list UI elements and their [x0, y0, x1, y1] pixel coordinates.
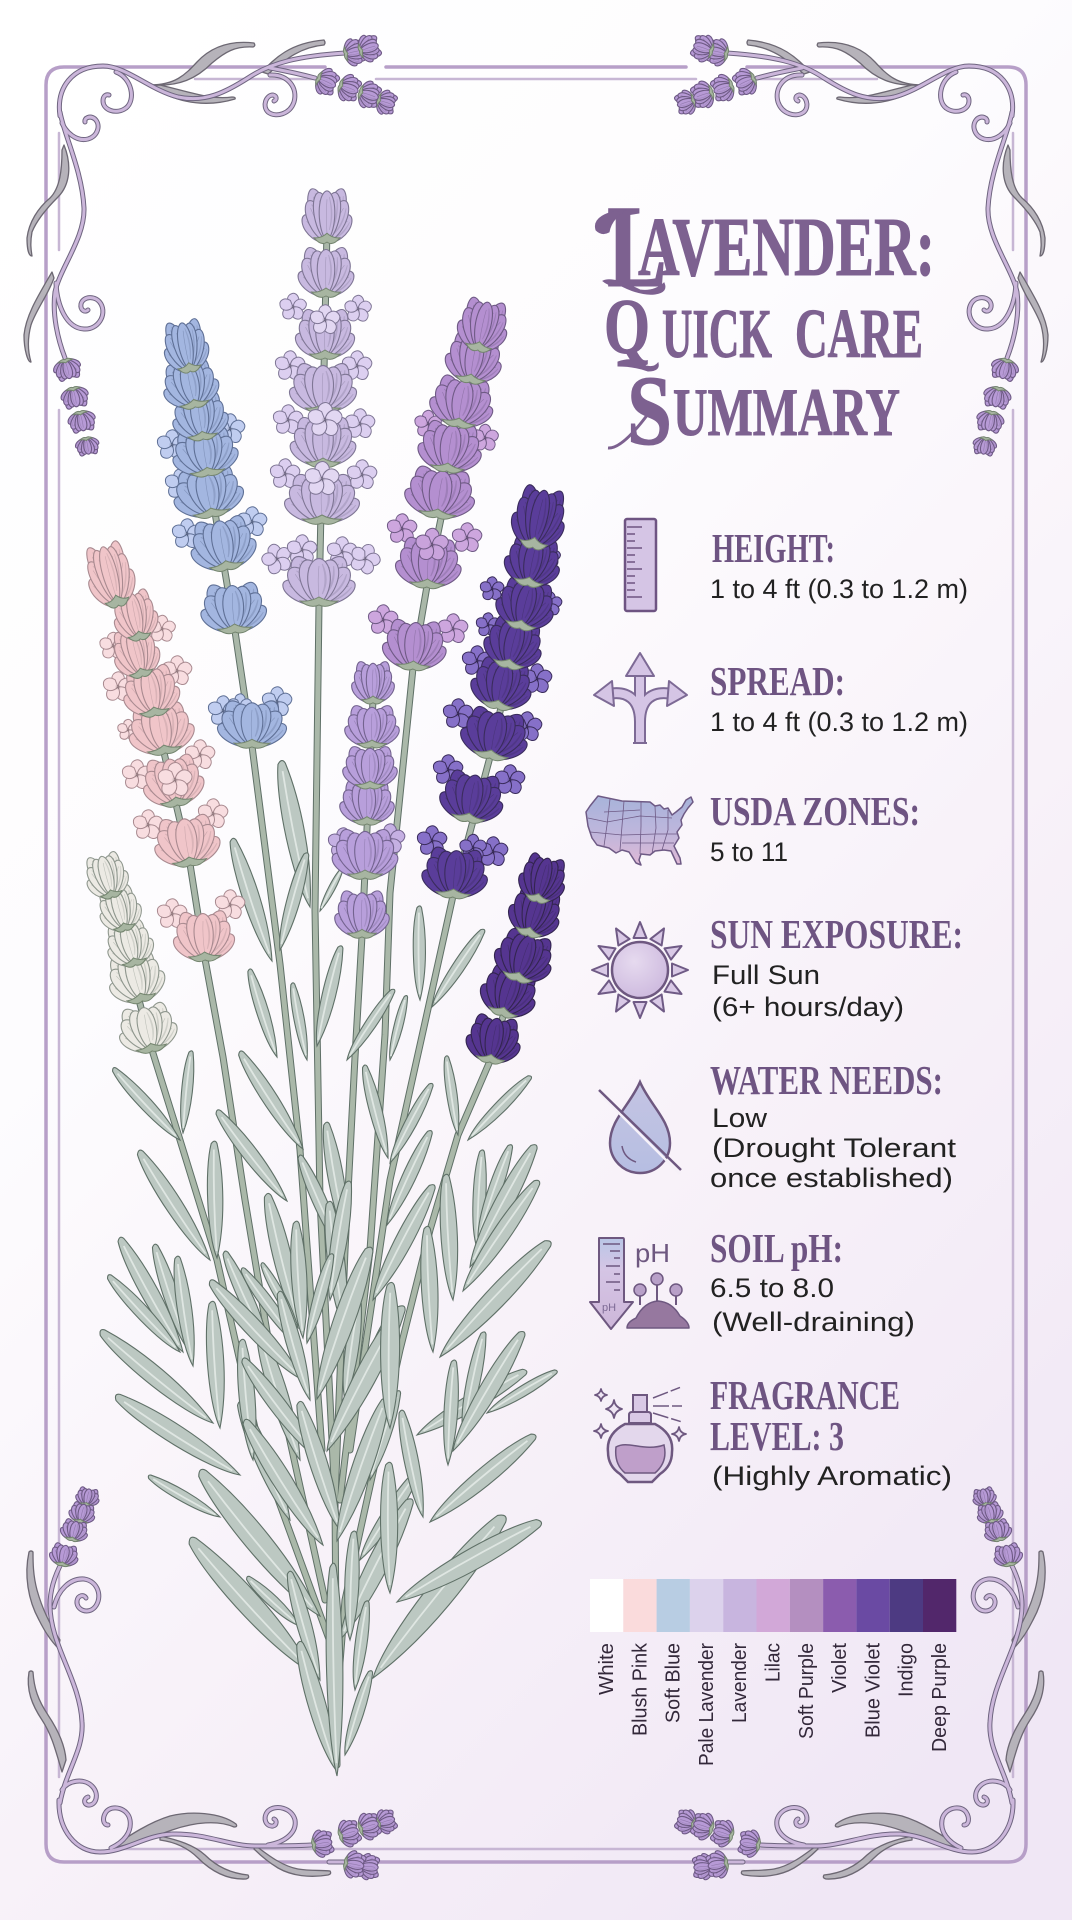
title: UMMARY	[673, 374, 900, 450]
flower spike: blush pink	[75, 533, 246, 968]
text: fragrance level: FRAGRANCE	[710, 1372, 900, 1418]
text: sun exposure	[710, 911, 963, 1022]
text: water needs: once established)	[710, 1163, 953, 1193]
title: AVENDER:	[638, 201, 935, 294]
icon: pH gauge and soil: pH	[635, 1238, 670, 1268]
palette labels: Violet	[829, 1643, 851, 1693]
text: water needs	[710, 1057, 957, 1193]
text: soil pH: 6.5 to 8.0	[710, 1273, 834, 1303]
icon: pH gauge and soil	[590, 1238, 689, 1329]
item: soil pH	[590, 1225, 915, 1337]
text: fragrance level: LEVEL: 3	[710, 1413, 844, 1459]
text: spread: 1 to 4 ft (0.3 to 1.2 m)	[710, 707, 968, 737]
palette labels: Blush Pink	[629, 1642, 651, 1736]
palette labels: Deep Purple	[929, 1643, 951, 1752]
title: Q	[604, 283, 650, 370]
palette labels: Soft Purple	[796, 1643, 818, 1739]
palette labels	[596, 1642, 951, 1766]
icon: sun	[592, 922, 688, 1018]
text: soil pH: (Well-draining)	[712, 1307, 915, 1337]
text: fragrance level: (Highly Aromatic)	[712, 1461, 952, 1491]
text: fragrance level	[710, 1372, 952, 1491]
text: height: 1 to 4 ft (0.3 to 1.2 m)	[710, 574, 968, 604]
title: CARE	[795, 296, 923, 373]
icon: spreading arrows	[594, 653, 687, 744]
text: soil pH	[710, 1225, 915, 1337]
corner ornament: top left	[24, 30, 401, 458]
icon: pH gauge and soil: pH	[602, 1302, 616, 1314]
text: water needs: (Drought Tolerant	[712, 1133, 957, 1163]
text: water needs: Low	[712, 1103, 768, 1133]
flower spike: deep purple	[459, 846, 575, 1073]
corner ornament: bottom left	[27, 1484, 401, 1883]
palette labels: Soft Blue	[663, 1643, 685, 1723]
text: spread: SPREAD:	[710, 658, 845, 704]
text: spread	[710, 658, 968, 737]
item: sun exposure	[592, 911, 963, 1022]
palette labels: Lilac	[762, 1643, 784, 1682]
icon: crossed-out water drop	[599, 1082, 681, 1174]
icon: US map	[586, 796, 693, 865]
text: USDA zones: USDA ZONES:	[710, 788, 920, 834]
palette labels: White	[596, 1643, 618, 1695]
title: UICK	[662, 296, 772, 373]
text: USDA zones: 5 to 11	[710, 837, 788, 867]
icon: perfume bottle	[594, 1387, 686, 1482]
item: height	[625, 519, 968, 611]
corner ornament: bottom right	[671, 1484, 1045, 1883]
flower spike: blue violet	[416, 477, 576, 906]
title: S	[627, 355, 672, 466]
icon: ruler	[625, 519, 656, 611]
text: height: HEIGHT:	[712, 525, 835, 571]
flower spike: soft blue	[154, 313, 293, 753]
text: sun exposure: Full Sun	[712, 960, 820, 990]
item: fragrance level	[594, 1372, 952, 1491]
flower spike: orchid purple	[367, 291, 517, 678]
plant stems	[112, 230, 538, 1765]
item: water needs	[599, 1057, 957, 1193]
item: spread	[594, 653, 968, 744]
palette swatches	[590, 1579, 956, 1632]
text: USDA zones	[710, 788, 920, 867]
lavender plant illustration	[75, 185, 576, 1776]
corner ornament: top right	[671, 30, 1048, 458]
flower spike: pale lavender	[256, 185, 386, 611]
text: height	[710, 525, 968, 604]
palette labels: Indigo	[896, 1643, 918, 1697]
flower spike: white	[77, 845, 186, 1064]
title	[595, 181, 935, 466]
title: L	[607, 181, 667, 312]
colour palette legend	[590, 1579, 956, 1766]
item: USDA zones	[586, 788, 920, 867]
palette labels: Lavender	[729, 1643, 751, 1723]
silver-green foliage	[94, 759, 560, 1776]
flower spike: lavender	[327, 658, 406, 943]
palette labels: Blue Violet	[862, 1643, 884, 1738]
text: water needs: WATER NEEDS:	[710, 1057, 943, 1103]
text: soil pH: SOIL pH:	[710, 1225, 843, 1271]
text: sun exposure: SUN EXPOSURE:	[710, 911, 963, 957]
text: sun exposure: (6+ hours/day)	[712, 992, 904, 1022]
palette labels: Pale Lavender	[696, 1643, 718, 1766]
